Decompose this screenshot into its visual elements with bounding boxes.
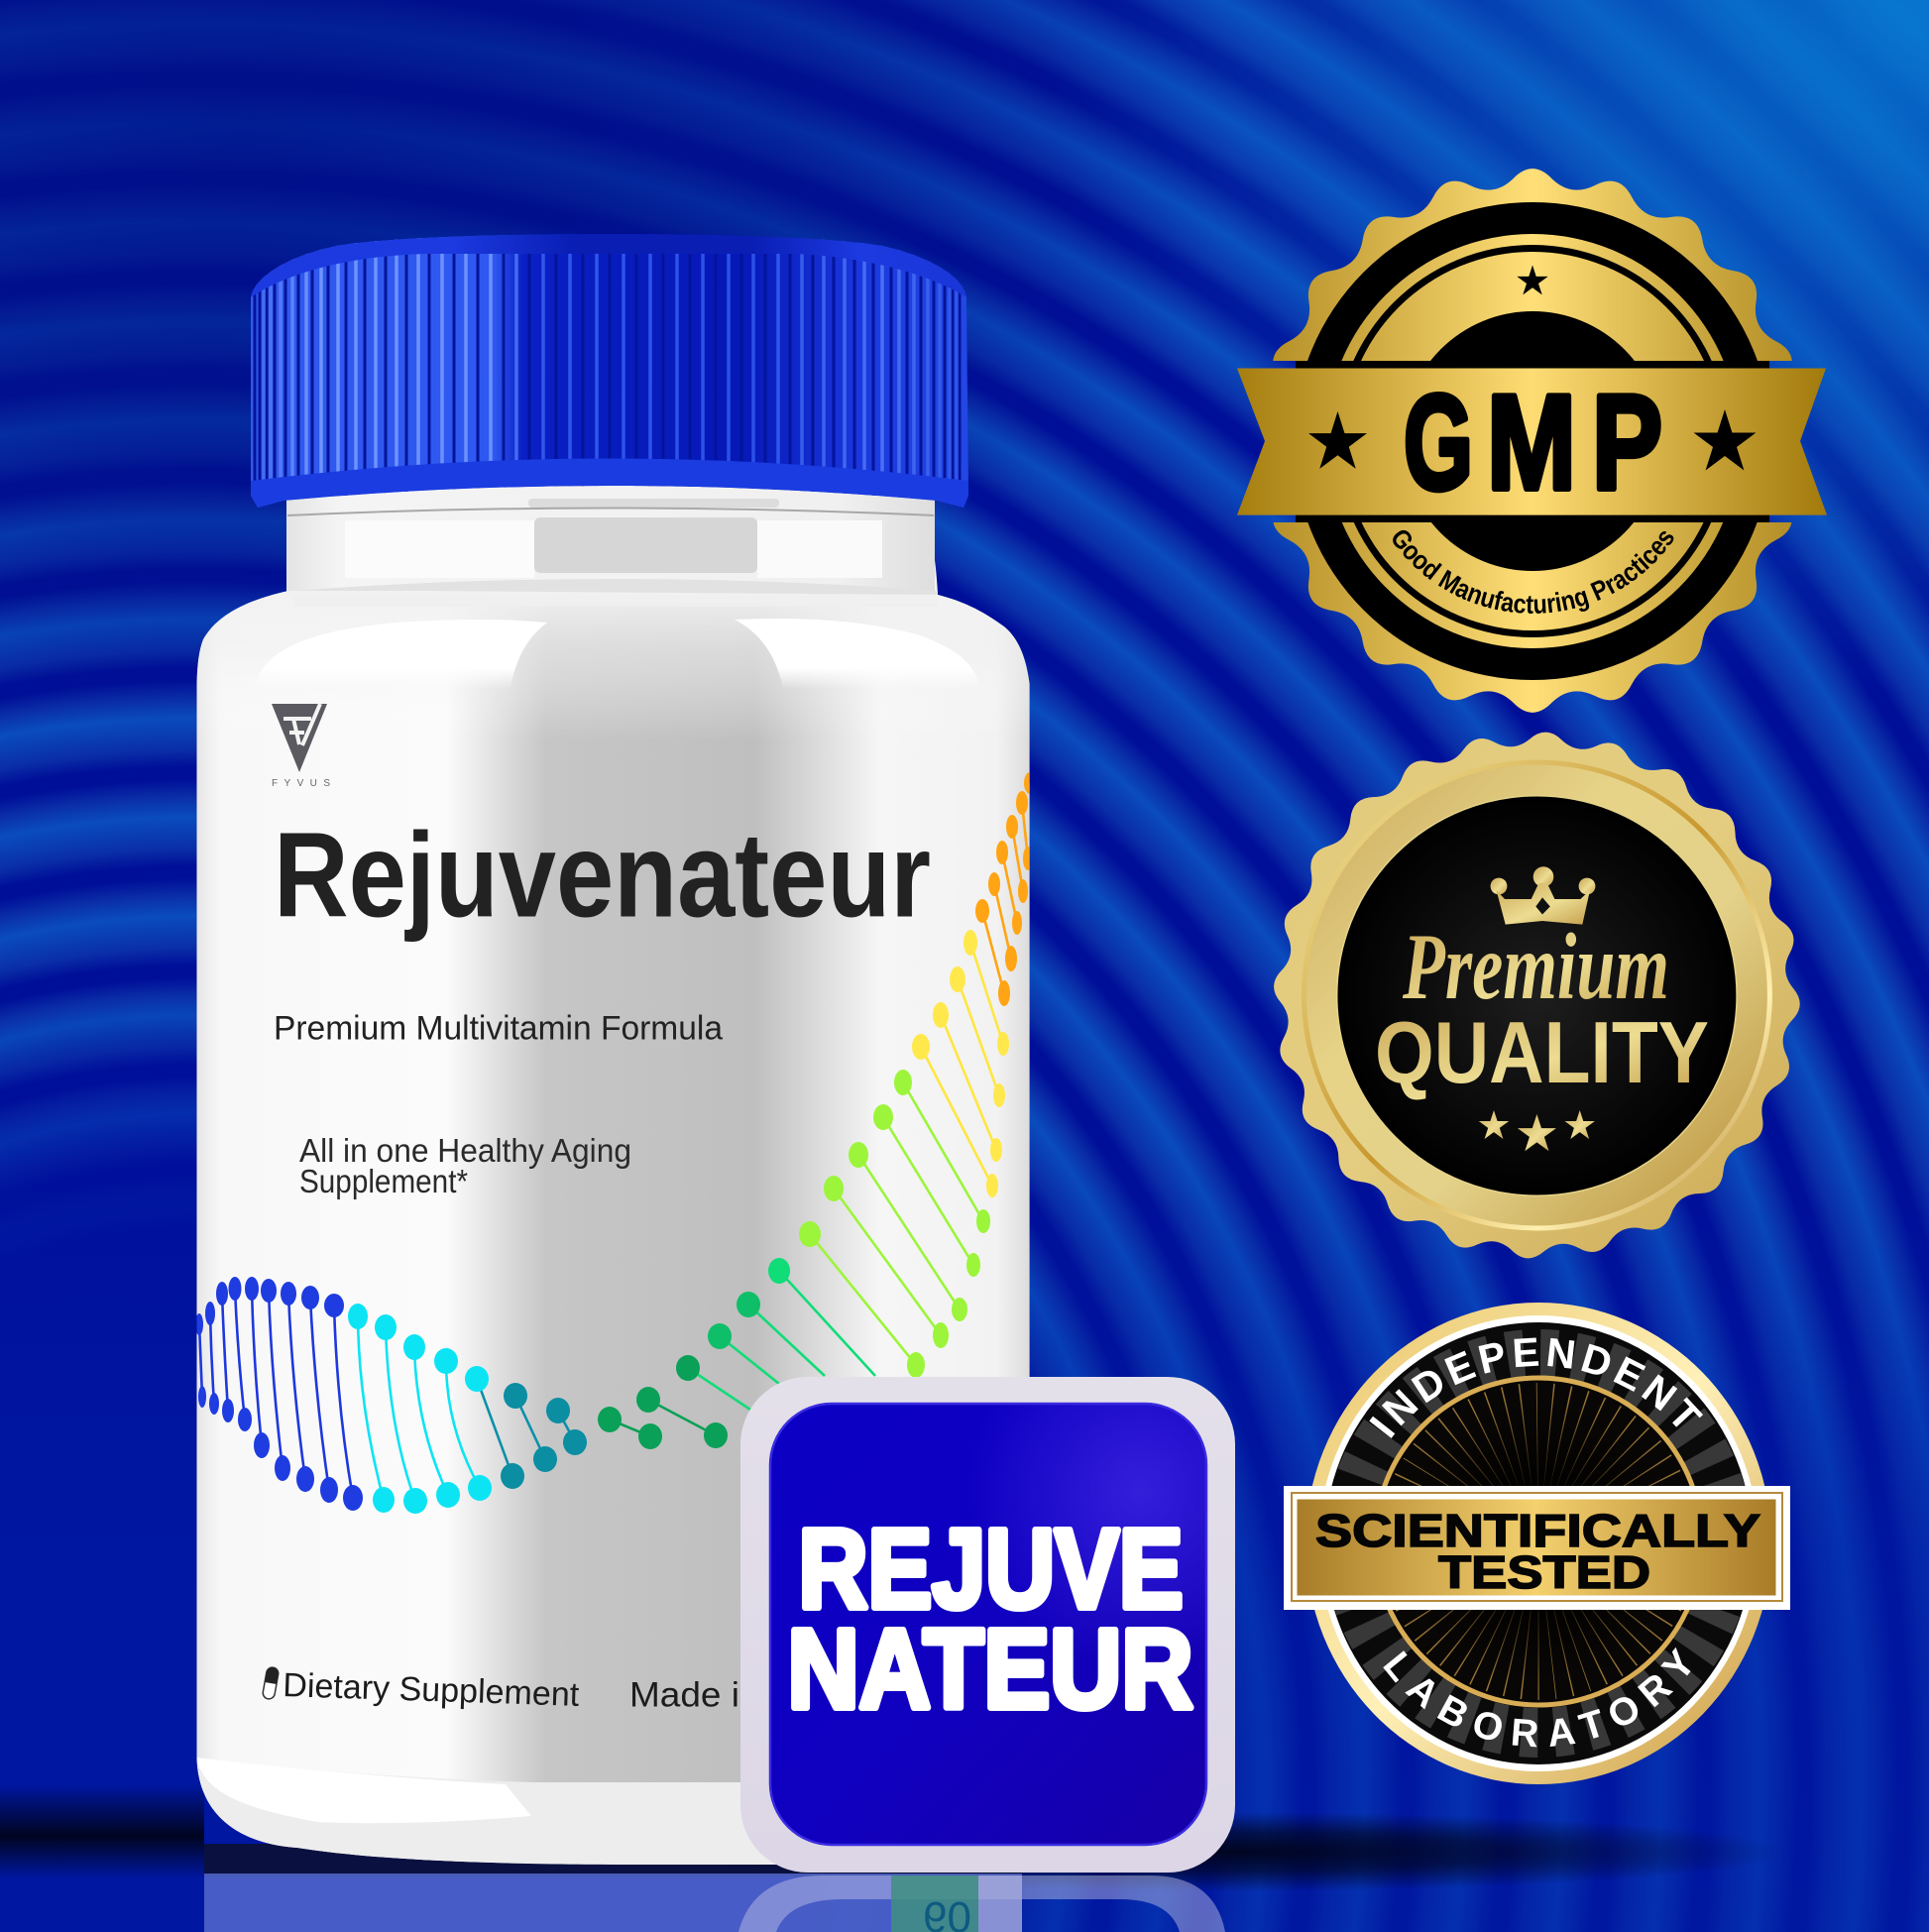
panel: premium quality badge (1265, 723, 1809, 1268)
bottle base (196, 1758, 1030, 1865)
ribbon left star (1308, 411, 1367, 469)
ribbon (1284, 1486, 1790, 1610)
ribbon text: SCIENTIFICALLY (1315, 1505, 1760, 1556)
outer gold ring (1305, 1303, 1771, 1784)
bottle shoulder gloss (196, 591, 1030, 718)
ribbon text (1315, 1505, 1760, 1598)
bottle cap (248, 226, 971, 513)
GMP lettering: M (1487, 367, 1576, 517)
made in label: Made i (629, 1675, 739, 1715)
GMP lettering: P (1592, 367, 1662, 517)
white ring (1318, 1315, 1759, 1771)
bottom curved text: LABORATORY (1383, 1648, 1691, 1747)
bottle neck (286, 486, 938, 607)
subtitle: Premium Multivitamin Formula (274, 1009, 723, 1047)
dietary supplement label: Dietary Supplement (283, 1666, 580, 1714)
seal (1261, 169, 1804, 713)
product name: Rejuvenateur (274, 807, 931, 942)
bottle body (196, 501, 1030, 1865)
ribbon right star (1694, 409, 1756, 471)
brand logo: FYVUS (272, 778, 330, 789)
scalloped seal (1265, 723, 1809, 1268)
top curved text: INDEPENDENT (1369, 1338, 1703, 1438)
inner gold circle (1375, 1378, 1702, 1705)
gold ring (1304, 762, 1769, 1228)
panel: scientifically tested badge (1284, 1303, 1790, 1784)
sunburst rays (1378, 1381, 1699, 1702)
icon: crown (1491, 866, 1595, 925)
curved caption: Good Manufacturing Practices (1393, 529, 1673, 615)
bold word: QUALITY (1375, 1003, 1709, 1101)
icon: capsule (262, 1666, 280, 1700)
GMP lettering: G (1404, 367, 1473, 517)
box title: REJUVE (799, 1507, 1184, 1632)
panel: GMP badge (1237, 169, 1827, 713)
black ring (1324, 1322, 1753, 1764)
ring segments (1349, 1354, 1728, 1733)
panel: blue product box (740, 1377, 1235, 1873)
tagline: All in one Healthy Aging (299, 1132, 631, 1169)
brand logo (272, 704, 330, 789)
box face (770, 1404, 1206, 1845)
GMP lettering (1404, 367, 1662, 517)
three stars (1479, 1110, 1595, 1151)
floor shadow (0, 1784, 1784, 1891)
tagline (299, 1132, 631, 1199)
box frame (740, 1377, 1235, 1873)
top star (1517, 266, 1548, 294)
box title (787, 1507, 1193, 1731)
panel: supplement bottle (195, 226, 1036, 1865)
ribbon text: TESTED (1438, 1546, 1650, 1598)
script word: Premium (1402, 914, 1669, 1019)
dark band behind ribbon (1296, 361, 1769, 522)
box title: NATEUR (787, 1606, 1193, 1731)
dna helix graphic (195, 772, 1036, 1514)
bottle reflection on floor (204, 1874, 1225, 1932)
black disc (1337, 796, 1737, 1195)
ribbon (1237, 369, 1827, 515)
tagline: Supplement* (299, 1163, 468, 1199)
box face highlight (770, 1404, 1206, 1845)
